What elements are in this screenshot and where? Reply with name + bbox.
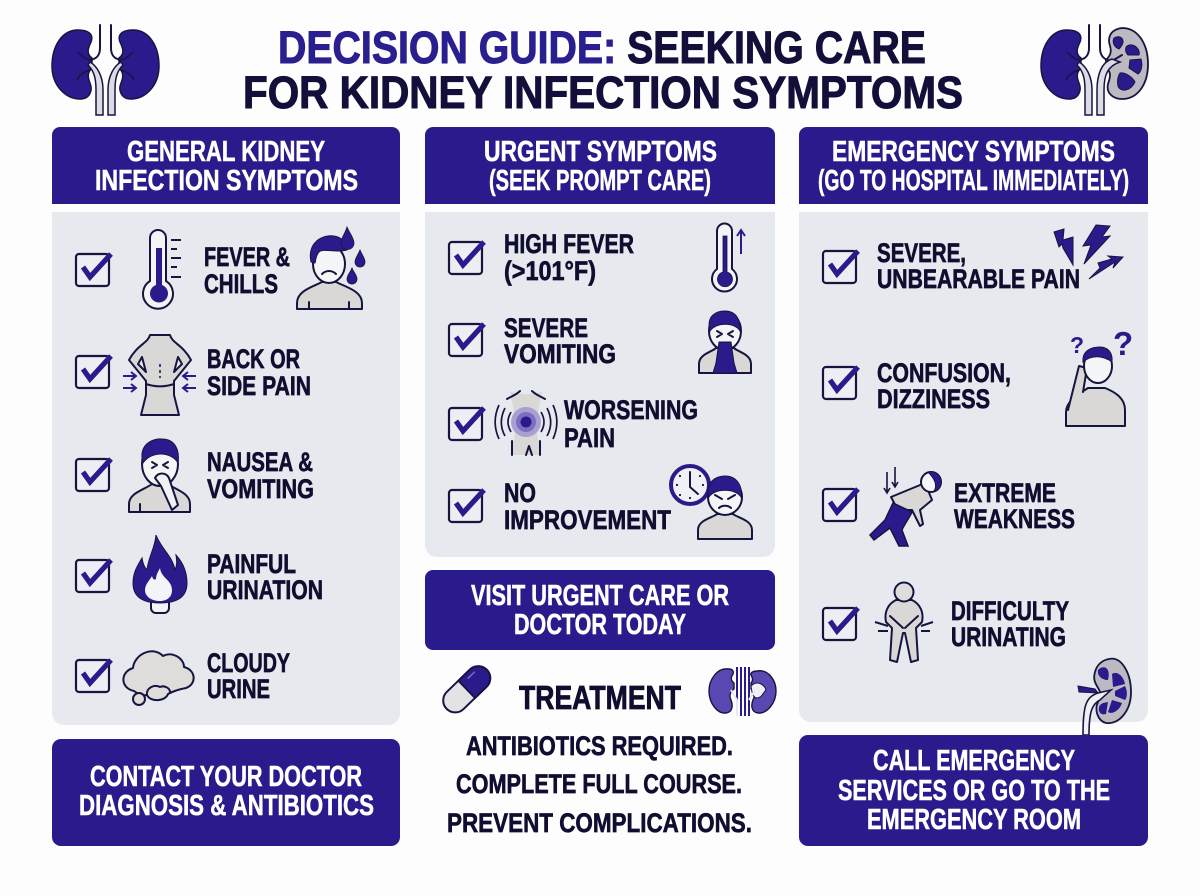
icon: kidney cross-section: [1078, 659, 1131, 735]
callout: contact your doctor: [52, 739, 400, 846]
row: no improvement: [449, 466, 752, 539]
text block: treatment instructions: PREVENT COMPLICATIONS.: [447, 808, 752, 838]
panel: urgent symptoms header: [425, 127, 775, 204]
icon: pill: [438, 661, 495, 717]
text block: treatment instructions: COMPLETE FULL COURSE.: [456, 769, 742, 799]
row: extreme weakness: EXTREME: [954, 478, 1056, 508]
panel: emergency symptoms list: [799, 212, 1148, 722]
panel: urgent symptoms header: URGENT SYMPTOMS: [484, 136, 717, 168]
row: painful urination: URINATION: [207, 575, 323, 605]
callout: visit urgent care: [425, 570, 775, 650]
panel: emergency symptoms header: [799, 127, 1148, 204]
row: fever and chills: FEVER &: [204, 242, 290, 272]
panel: general symptoms header: [52, 127, 400, 204]
icon: kidneys right with cross-section: [1041, 25, 1148, 115]
row: painful urination: [76, 535, 323, 613]
row: painful urination: PAINFUL: [207, 549, 296, 579]
row: cloudy urine: [76, 648, 290, 705]
panel: general symptoms list: [52, 212, 400, 725]
icon: treatment kidneys: [709, 667, 776, 716]
icon: kidneys left: [52, 25, 159, 115]
panel: general symptoms header: GENERAL KIDNEY: [127, 136, 325, 168]
callout: call emergency services: EMERGENCY ROOM: [867, 804, 1081, 836]
row: high fever: (>101°F): [504, 256, 596, 286]
row: difficulty urinating: URINATING: [951, 622, 1066, 652]
heading: treatment: TREATMENT: [519, 679, 681, 716]
row: nausea and vomiting: [76, 439, 314, 512]
row: fever and chills: CHILLS: [204, 269, 278, 299]
callout: call emergency services: [799, 735, 1148, 846]
row: confusion and dizziness: CONFUSION,: [877, 358, 1011, 388]
callout: call emergency services: CALL EMERGENCY: [873, 745, 1075, 777]
row: severe pain: [823, 225, 1123, 294]
title: FOR KIDNEY INFECTION SYMPTOMS: [243, 67, 963, 118]
row: confusion and dizziness: DIZZINESS: [877, 384, 990, 414]
row: back or side pain: [76, 335, 311, 415]
row: back or side pain: SIDE PAIN: [207, 371, 311, 401]
row: no improvement: IMPROVEMENT: [504, 505, 671, 535]
row: severe vomiting: VOMITING: [504, 339, 616, 369]
callout: visit urgent care: VISIT URGENT CARE OR: [471, 580, 729, 612]
row: nausea and vomiting: NAUSEA &: [207, 447, 313, 477]
panel: urgent symptoms list: [425, 212, 775, 557]
row: high fever: HIGH FEVER: [504, 229, 634, 259]
text block: treatment instructions: ANTIBIOTICS REQUIRED.: [466, 731, 733, 761]
row: confusion and dizziness: ?: [1113, 325, 1133, 362]
callout: contact your doctor: DIAGNOSIS & ANTIBIOTICS: [79, 790, 374, 822]
row: cloudy urine: CLOUDY: [207, 648, 290, 678]
row: severe pain: UNBEARABLE PAIN: [877, 264, 1080, 294]
row: no improvement: NO: [504, 478, 536, 508]
row: confusion and dizziness: [823, 325, 1133, 426]
row: confusion and dizziness: ?: [1070, 332, 1084, 358]
row: high fever: [449, 224, 745, 292]
row: severe pain: SEVERE,: [877, 238, 966, 268]
callout: contact your doctor: CONTACT YOUR DOCTOR: [90, 761, 362, 793]
callout: visit urgent care: DOCTOR TODAY: [514, 609, 686, 641]
panel: urgent symptoms header: (SEEK PROMPT CARE): [489, 165, 711, 197]
row: worsening pain: PAIN: [564, 423, 615, 453]
title: DECISION GUIDE: SEEKING CARE: [278, 22, 926, 73]
row: severe vomiting: [449, 311, 751, 373]
row: cloudy urine: URINE: [207, 674, 270, 704]
row: nausea and vomiting: VOMITING: [207, 474, 314, 504]
row: extreme weakness: WEAKNESS: [954, 504, 1075, 534]
text block: treatment instructions: [447, 731, 752, 838]
row: worsening pain: WORSENING: [564, 395, 698, 425]
callout: call emergency services: SERVICES OR GO TO THE: [838, 775, 1110, 807]
title: [243, 22, 963, 118]
row: severe vomiting: SEVERE: [504, 313, 588, 343]
panel: general symptoms header: INFECTION SYMPTOMS: [95, 165, 358, 197]
row: difficulty urinating: [823, 582, 1069, 662]
row: worsening pain: [449, 391, 698, 455]
row: back or side pain: BACK OR: [207, 344, 300, 374]
row: difficulty urinating: DIFFICULTY: [951, 596, 1069, 626]
panel: emergency symptoms header: EMERGENCY SYMPTOMS: [832, 136, 1115, 168]
row: extreme weakness: [823, 467, 1075, 546]
row: fever and chills: [76, 227, 365, 309]
